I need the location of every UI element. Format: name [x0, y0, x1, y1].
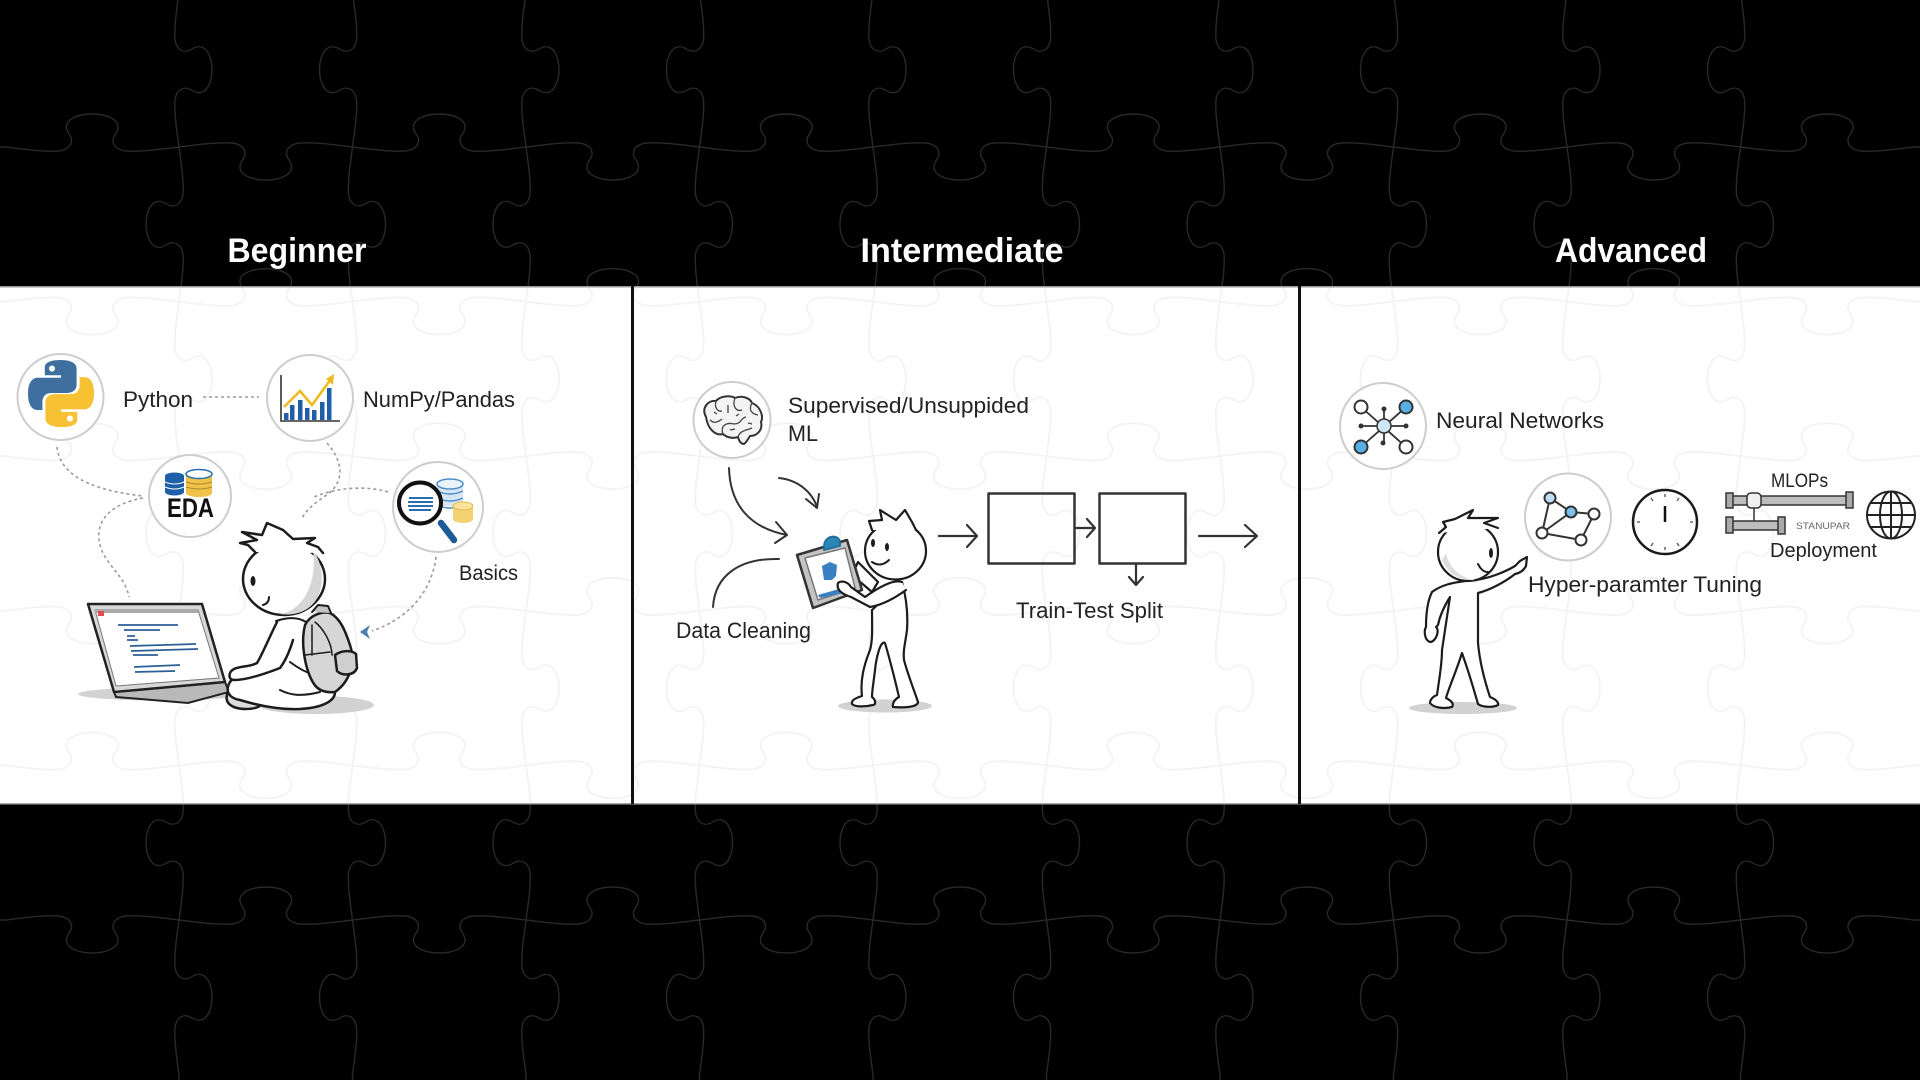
label: Supervised/Unsuppided ML [788, 393, 1029, 446]
backpack [303, 612, 352, 692]
icon: hyper-parameter graph [1525, 474, 1611, 560]
icon: MLOps pipeline: STANUPAR [1796, 521, 1851, 531]
divider [1298, 286, 1301, 804]
icon: neural network [1340, 383, 1426, 469]
panel: Beginner [0, 286, 632, 804]
dashed connectors [57, 397, 436, 631]
heading: Beginner: Beginner [228, 232, 366, 270]
label: Supervised/Unsuppided ML: Supervised/Unsuppided [788, 393, 1029, 418]
student head [243, 543, 325, 615]
label: Train-Test Split: Train-Test Split [1016, 598, 1163, 623]
label: Neural Networks: Neural Networks [1436, 408, 1604, 433]
label: Hyper-paramter Tuning: Hyper-paramter Tuning [1528, 572, 1762, 597]
label: Supervised/Unsuppided ML: ML [788, 421, 818, 446]
illustration: student pointing [1409, 510, 1527, 714]
label: Data Cleaning: Data Cleaning [676, 618, 811, 643]
divider [631, 286, 634, 804]
icon: EDA: EDA [167, 493, 214, 523]
label: NumPy/Pandas: NumPy/Pandas [363, 387, 515, 412]
label: MLOPs: MLOPs [1771, 471, 1828, 492]
illustration: student with clipboard [797, 510, 932, 712]
curved arrows [713, 468, 819, 607]
heading: Advanced: Advanced [1555, 232, 1707, 270]
icon: globe [1867, 491, 1915, 538]
illustration: student with laptop [78, 523, 374, 714]
label: Deployment: Deployment [1770, 540, 1877, 562]
label: Python: Python [123, 387, 193, 412]
heading: Intermediate: Intermediate [860, 232, 1064, 270]
flow boxes and arrows [939, 494, 1257, 585]
icon: Basics magnifier [393, 462, 483, 552]
icon: MLOps pipeline [1726, 492, 1853, 534]
icon: NumPy chart [267, 355, 353, 441]
panel: Advanced [1301, 286, 1920, 804]
arrowhead to student [360, 625, 370, 639]
icon: Python [18, 354, 104, 440]
icon: EDA [149, 455, 231, 537]
icon: clock [1633, 490, 1697, 554]
panel: Intermediate [634, 286, 1298, 804]
laptop [88, 604, 229, 703]
label: Basics: Basics [459, 562, 518, 585]
clipboard [797, 537, 862, 608]
icon: brain [694, 382, 770, 458]
student body [227, 523, 357, 709]
